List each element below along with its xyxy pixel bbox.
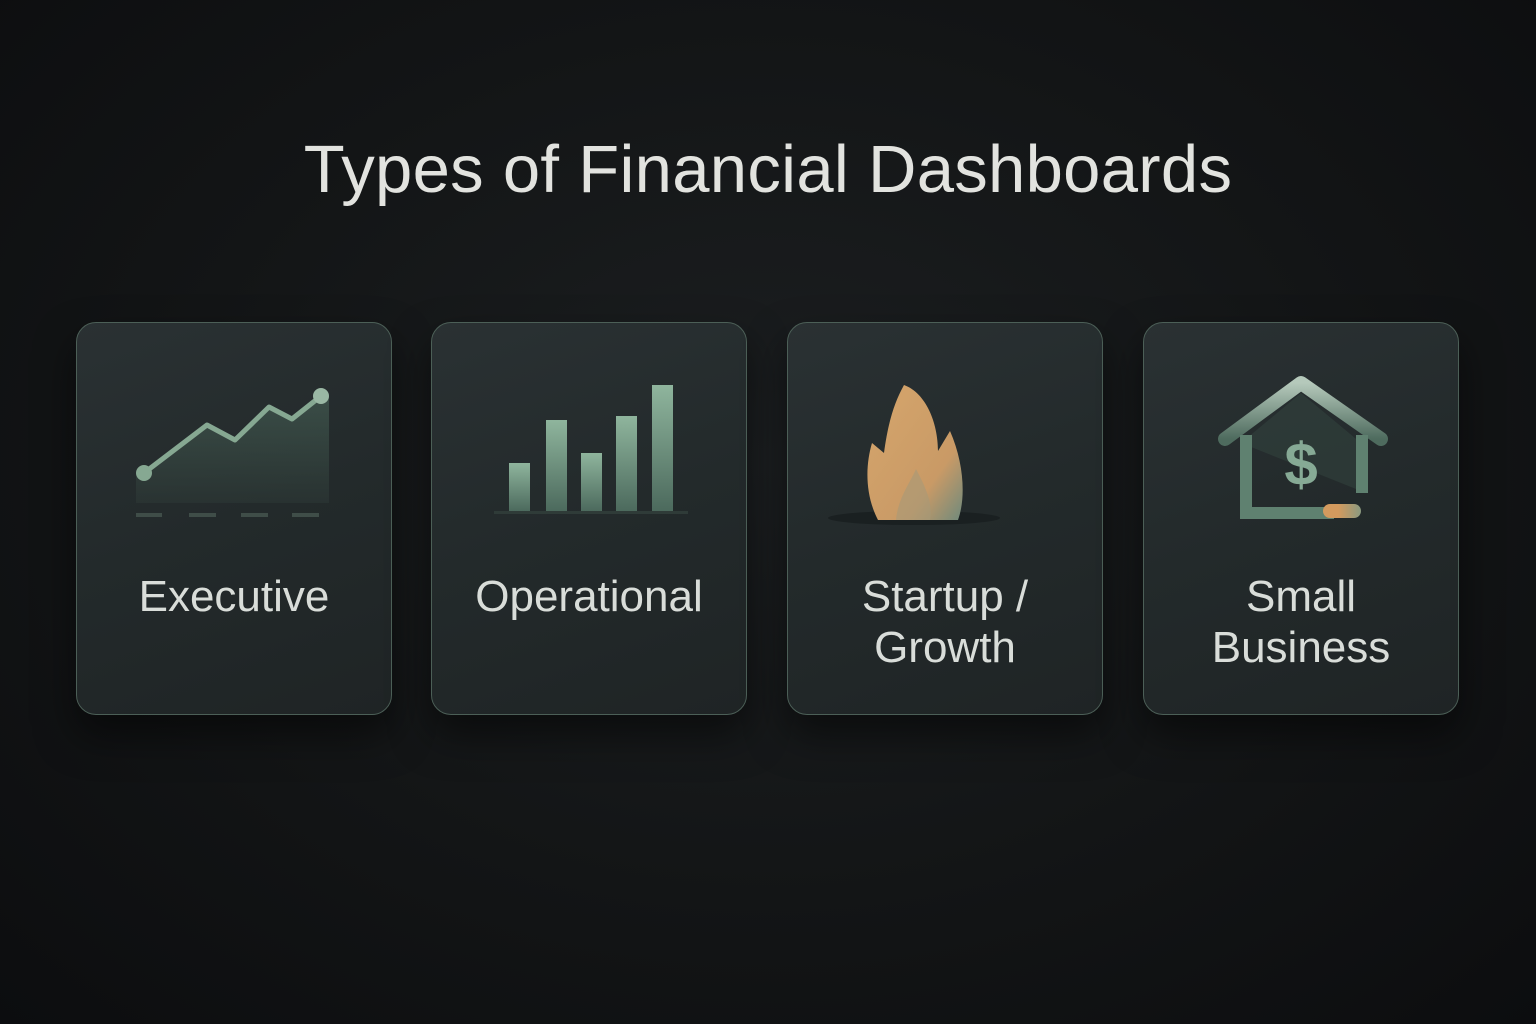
panel: startup growth xyxy=(787,322,1103,715)
label: Executive xyxy=(139,572,329,621)
label xyxy=(862,572,1028,672)
icon: line chart xyxy=(136,388,329,517)
icon: flame xyxy=(828,385,1000,525)
label: Growth xyxy=(874,623,1016,672)
label: Startup / xyxy=(862,572,1028,621)
label: Business xyxy=(1212,623,1390,672)
label: Small xyxy=(1246,572,1356,621)
panel: executive xyxy=(76,322,392,715)
panel: small business xyxy=(1143,322,1459,715)
title: Types of Financial Dashboards xyxy=(304,132,1232,207)
label xyxy=(1212,572,1390,672)
label: Operational xyxy=(475,572,703,621)
icon: house with dollar xyxy=(1218,376,1388,519)
panel: operational xyxy=(431,322,747,715)
icon: house with dollar: $ xyxy=(1284,431,1318,498)
icon: bar chart xyxy=(494,385,688,514)
